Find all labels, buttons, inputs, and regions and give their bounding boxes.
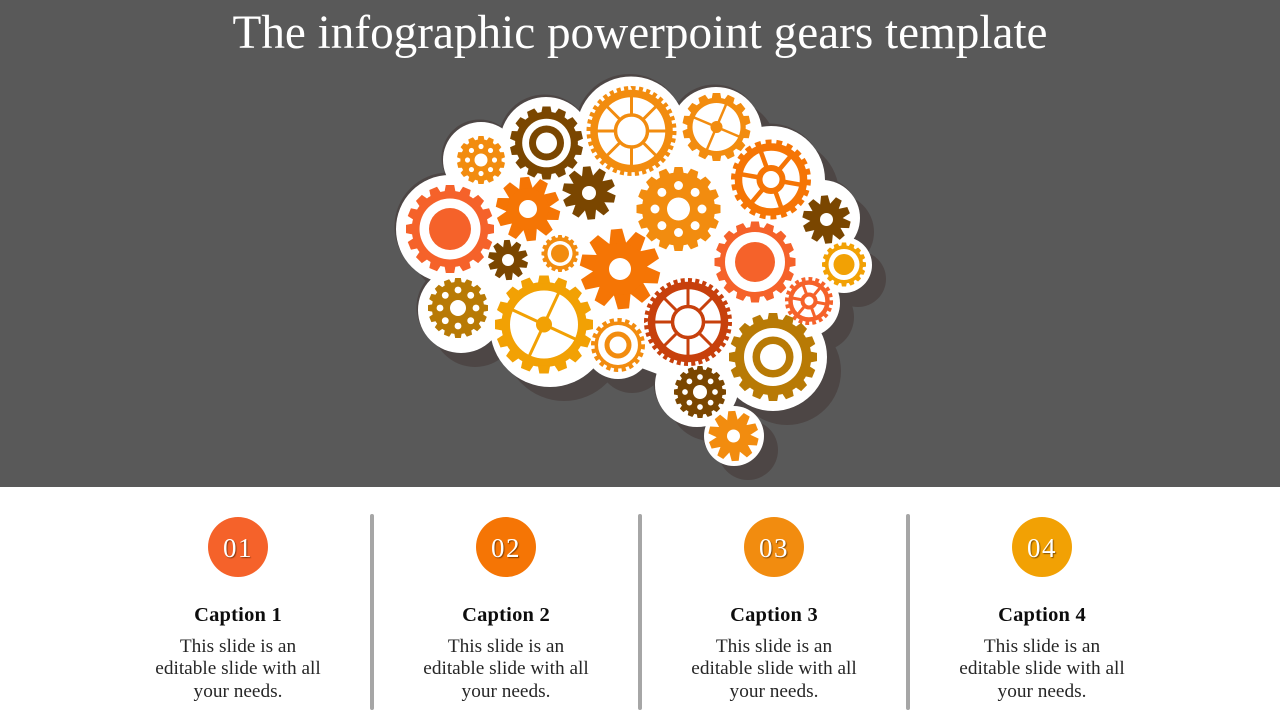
number badge 02	[476, 517, 536, 577]
gear: dark red fine-tooth spoked	[646, 280, 730, 364]
step 4	[959, 517, 1125, 702]
gear: red-orange disc right	[714, 222, 796, 302]
body text 1: editable slide with all	[155, 658, 321, 679]
body text 4: This slide is an	[984, 636, 1100, 656]
gear: small orange with holes	[457, 136, 505, 184]
body text 1	[155, 636, 321, 702]
number badge 04: 04	[1027, 533, 1057, 563]
number badge 03	[744, 517, 804, 577]
body text 3: your needs.	[730, 681, 818, 702]
body text 2: editable slide with all	[423, 658, 589, 679]
gear: bottom orange star	[706, 409, 761, 463]
gear: brown with holes	[674, 366, 726, 418]
brain silhouette with shadow	[394, 74, 886, 480]
gear: deep orange six-spoke	[734, 142, 808, 217]
caption 1: Caption 1	[194, 604, 282, 626]
body text 1: your needs.	[194, 681, 282, 702]
body text 2: your needs.	[462, 681, 550, 702]
step 1	[155, 517, 321, 702]
body text 3	[691, 636, 857, 702]
gear: orange star	[492, 174, 564, 244]
gear: orange four-spoke	[682, 93, 751, 161]
body text 3: This slide is an	[716, 636, 832, 656]
number badge 01: 01	[223, 533, 253, 563]
body text 1: This slide is an	[180, 636, 296, 656]
gear: amber right	[822, 242, 866, 286]
gear: small brown star	[487, 239, 529, 281]
title: The infographic powerpoint gears template	[232, 7, 1048, 59]
number badge 04	[1012, 517, 1072, 577]
number badge 03: 03	[759, 533, 789, 563]
body text 3: editable slide with all	[691, 658, 857, 679]
gear: small orange ring	[542, 235, 578, 272]
gear: orange ring lower	[593, 320, 643, 370]
caption 4: Caption 4	[998, 604, 1086, 626]
body text 4: editable slide with all	[959, 658, 1125, 679]
gear: large ochre ring	[729, 313, 817, 401]
body text 4	[959, 636, 1125, 702]
body text 2	[423, 636, 589, 702]
body text 4: your needs.	[998, 681, 1086, 702]
number badge 02: 02	[491, 533, 521, 563]
gear: brown star	[560, 164, 618, 222]
caption 3: Caption 3	[730, 604, 818, 626]
gear: large amber four-spoke	[495, 276, 593, 374]
gear: brown right	[800, 193, 853, 246]
gear: orange fine-tooth spoked	[589, 88, 674, 174]
caption 2: Caption 2	[462, 604, 550, 626]
number badge 01	[208, 517, 268, 577]
gear: large orange with holes	[636, 167, 720, 251]
gear: red-orange disc left	[406, 185, 494, 273]
gear: central orange star	[576, 226, 664, 312]
body text 2: This slide is an	[448, 636, 564, 656]
gear: ochre with holes	[428, 278, 488, 338]
step 2	[423, 517, 589, 702]
step 3	[691, 517, 857, 702]
dark header band	[0, 0, 1280, 487]
gear: brown ring	[510, 106, 583, 180]
gear: small red-orange spoked	[787, 279, 831, 323]
brain gears illustration	[394, 74, 886, 480]
